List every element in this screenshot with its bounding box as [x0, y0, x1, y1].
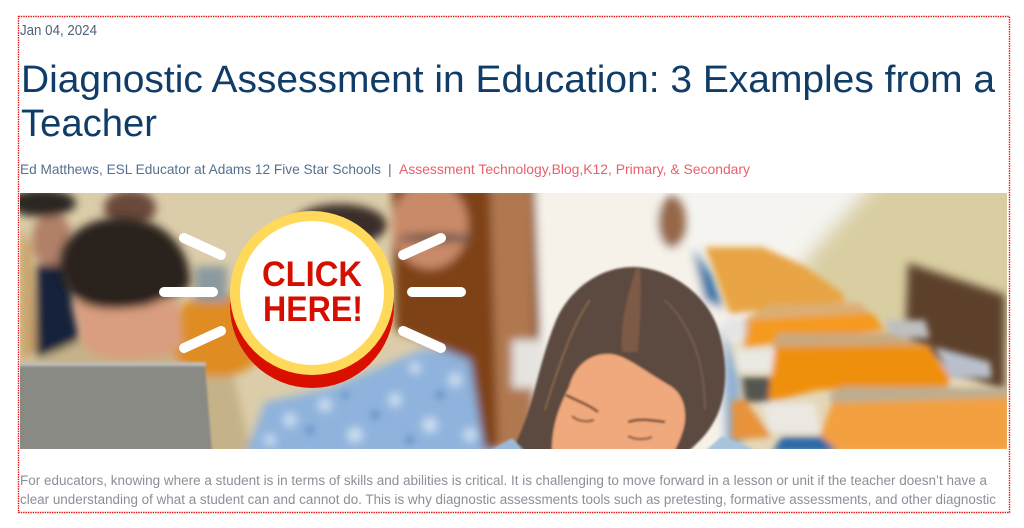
author and categories line: | [388, 161, 392, 177]
intro paragraph: clear understanding of what a student can and cannot do. This is why diagnostic assessments tools such as pretesting, formative assessments, and other diagnostic [20, 492, 996, 507]
author and categories line: Assessment Technology,Blog,K12, Primary, & Secondary [399, 161, 750, 177]
title [21, 59, 996, 145]
author and categories line: Ed Matthews, ESL Educator at Adams 12 Five Star Schools [20, 161, 381, 177]
button label: HERE! [263, 290, 363, 329]
button label [262, 255, 363, 329]
title: Diagnostic Assessment in Education: 3 Examples from a [21, 59, 996, 101]
publication date: Jan 04, 2024 [20, 23, 97, 39]
burst rays [164, 238, 461, 348]
author and categories line [20, 161, 750, 177]
intro paragraph: For educators, knowing where a student is in terms of skills and abilities is critical. It is challenging to move forward in a lesson or unit if the teacher doesn’t have a [20, 473, 987, 488]
intro paragraph [20, 473, 996, 507]
plaid shirt pattern [264, 362, 477, 446]
click here button [164, 211, 461, 388]
title: Teacher [21, 103, 157, 145]
laptop [18, 362, 212, 452]
girl in foreground [488, 267, 760, 452]
boy [60, 218, 190, 360]
classroom photo [20, 193, 1007, 449]
button label: CLICK [262, 255, 362, 294]
